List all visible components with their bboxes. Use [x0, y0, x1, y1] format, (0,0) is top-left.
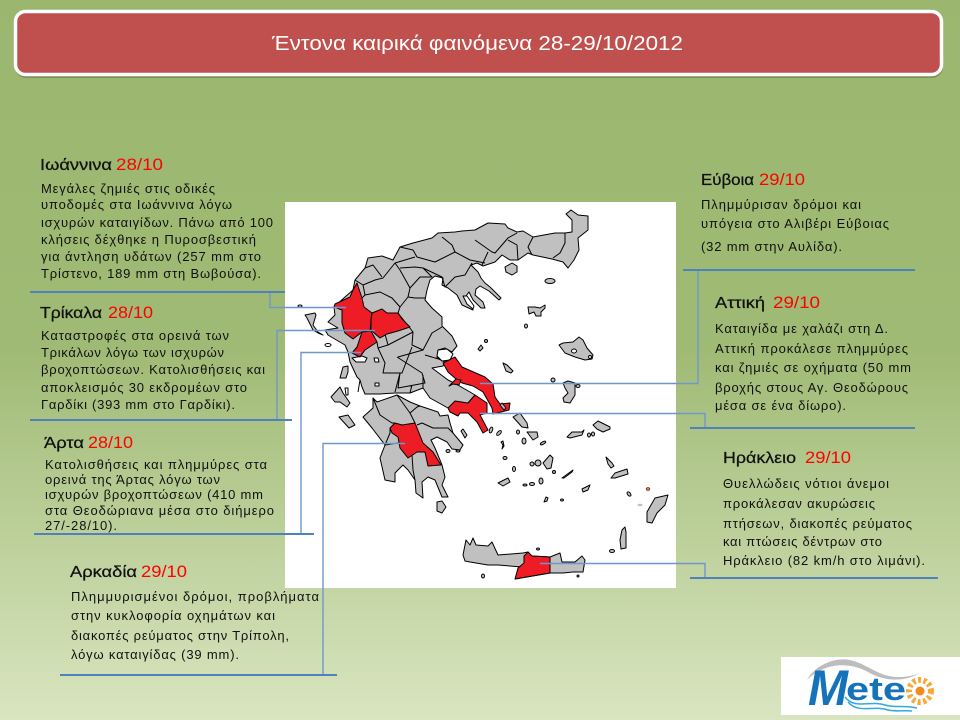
highlighted: Evia: [443, 357, 510, 414]
panel: Ioannina: [30, 155, 285, 292]
panel: Ioannina: κλήσεις δέχθηκε η Πυροσβεστική: [41, 232, 256, 247]
panel: Heraklion: πτήσεων, διακοπές ρεύματος: [723, 516, 912, 531]
panel: Arkadia: Αρκαδία: [70, 564, 137, 581]
panel: Heraklion: Ηράκλειο: [723, 450, 796, 467]
Peloponnese: [363, 395, 463, 498]
panel: Ioannina: υποδομές στα Ιωάννινα λόγω: [41, 197, 232, 212]
panel: Evia: [683, 170, 915, 270]
panel: Heraklion: Ηράκλειο (82 km/h στο λιμάνι).: [723, 553, 925, 568]
panel: Evia: 29/10: [759, 170, 805, 189]
connector lines from text panels to map: [270, 270, 705, 675]
panel: Arta: 28/10: [88, 433, 133, 452]
panel: Heraklion: και πτώσεις δέντρων στο: [723, 534, 882, 549]
panel: Attica: βροχής στους Αγ. Θεοδώρους: [715, 380, 908, 395]
panel: Arkadia: λόγω καταιγίδας (39 mm).: [71, 647, 239, 662]
panel: Arkadia: [60, 562, 337, 675]
panel: Heraklion: [690, 448, 938, 578]
mainland Greece: [325, 210, 588, 408]
panel: Ioannina: ισχυρών καταιγίδων. Πάνω από 100: [41, 215, 273, 230]
title banner: Έντονα καιρικά φαινόμενα 28-29/10/2012: [271, 33, 683, 55]
islands: [298, 263, 668, 578]
panel: Evia: (32 mm στην Αυλίδα).: [701, 239, 842, 254]
highlighted: Trikala: [371, 309, 410, 338]
panel: Trikala: [30, 303, 292, 420]
panel: Trikala: Τρίκαλα: [40, 305, 102, 322]
map of Greece: [285, 202, 676, 588]
logo: Meteo: ete: [846, 671, 906, 707]
panel: Arta: 27/-28/10).: [45, 518, 117, 533]
panel: Heraklion: 29/10: [805, 448, 851, 467]
panel: Attica: Καταιγίδα με χαλάζι στη Δ.: [715, 321, 888, 336]
highlighted: Ioannina: [334, 283, 372, 339]
panel: Arkadia: 29/10: [141, 562, 187, 581]
logo: Meteo: [781, 657, 960, 716]
panel: Attica: Αττική προκάλεσε πλημμύρες: [715, 341, 908, 356]
prefecture borders: [355, 233, 565, 480]
panel: Arta: Κατολισθήσεις και πλημμύρες στα: [45, 457, 267, 472]
panel: Arta: Άρτα: [44, 435, 84, 452]
highlighted: Attica: [448, 395, 488, 433]
gulf cut-outs: [437, 349, 453, 361]
panel: Evia: Εύβοια: [701, 172, 754, 189]
panel: Arta: [34, 433, 314, 534]
panel: Trikala: Γαρδίκι (393 mm στο Γαρδίκι).: [41, 397, 235, 412]
panel: Arta: ορεινά της Άρτας λόγω των: [45, 472, 220, 487]
panel: Attica: μέσα σε ένα δίωρο).: [715, 398, 846, 413]
panel: Ioannina: Μεγάλες ζημιές στις οδικές: [41, 181, 215, 196]
panel: Arkadia: στην κυκλοφορία οχημάτων και: [71, 608, 275, 623]
logo: Meteo: M: [808, 660, 849, 716]
panel: Arkadia: Πλημμυρισμένοι δρόμοι, προβλήματα: [71, 589, 319, 604]
panel: Attica: 29/10: [773, 293, 820, 312]
panel: Ioannina: 28/10: [116, 155, 163, 174]
panel: Ioannina: για άντληση υδάτων (257 mm στο: [41, 249, 261, 264]
panel: Trikala: 28/10: [108, 303, 153, 322]
panel: Heraklion: προκάλεσαν ακυρώσεις: [723, 496, 875, 511]
highlighted: Heraklion: [515, 552, 550, 579]
panel: Attica: Αττική: [715, 295, 765, 312]
panel: Trikala: Καταστροφές στα ορεινά των: [41, 328, 229, 343]
panel: Arta: στα Θεοδώριανα μέσα στο διήμερο: [45, 503, 274, 518]
panel: Evia: υπόγεια στο Αλιβέρι Εύβοιας: [701, 216, 889, 231]
panel: Arkadia: διακοπές ρεύματος στην Τρίπολη,: [71, 628, 289, 643]
highlighted: Arta: [352, 331, 377, 357]
panel: Trikala: βροχοπτώσεων. Κατολισθήσεις και: [41, 362, 265, 377]
panel: Heraklion: Θυελλώδεις νότιοι άνεμοι: [723, 476, 889, 491]
panel: Arta: ισχυρών βροχοπτώσεων (410 mm: [45, 487, 263, 502]
panel: Ioannina: Τρίστενο, 189 mm στη Βωβούσα).: [41, 266, 261, 281]
title banner: [15, 12, 943, 78]
panel: Ioannina: Ιωάννινα: [40, 157, 112, 174]
panel: Trikala: αποκλεισμός 30 εκδρομέων στο: [41, 380, 247, 395]
panel: Trikala: Τρικάλων λόγω των ισχυρών: [41, 345, 224, 360]
panel: Attica: [690, 293, 915, 428]
Crete: [463, 538, 585, 579]
panel: Evia: Πλημμύρισαν δρόμοι και: [701, 197, 861, 212]
highlighted: Arkadia: [390, 423, 441, 466]
panel: Attica: και ζημιές σε οχήματα (50 mm: [715, 360, 911, 375]
icon: sun: [909, 680, 931, 702]
